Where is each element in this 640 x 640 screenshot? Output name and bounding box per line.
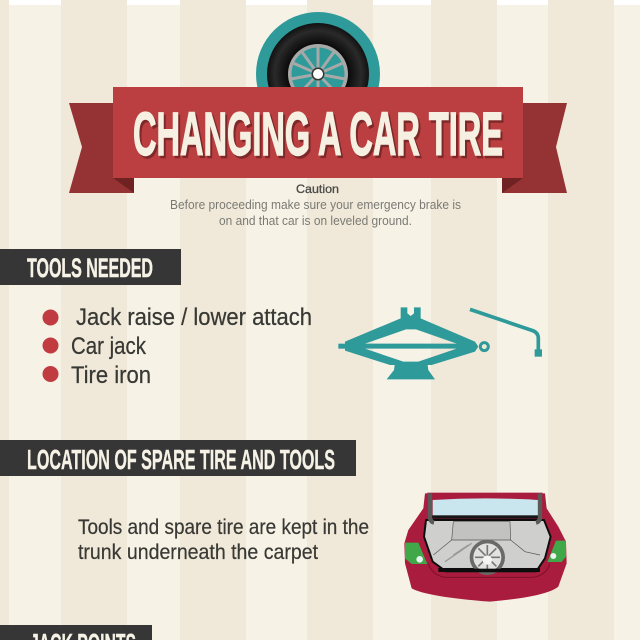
heading: location of spare tire and tools [0,440,356,476]
trunk lid [427,493,543,523]
tail light: right [547,541,566,562]
tail light: left [405,543,427,564]
location text block: trunk underneath the carpet [78,541,318,564]
heading: location of spare tire and tools: LOCATION OF SPARE TIRE AND TOOLS [27,444,335,475]
heading: tools needed: TOOLS NEEDED [27,253,153,283]
icon: car jack [338,307,488,379]
car body [404,493,567,602]
list item: tire iron [42,362,151,389]
caution text block: on and that car is on leveled ground. [219,213,412,228]
list item: tire iron: Tire iron [71,362,151,389]
icon: tire iron [470,309,542,357]
caution text block [170,182,461,228]
list item: car jack: Car jack [71,333,147,360]
illustration: car trunk with spare tire [404,493,567,602]
list item: jack raise / lower attach: Jack raise / lower attach [76,304,312,331]
icon: car wheel [256,12,380,136]
bumper line [428,563,550,577]
caution text block: Before proceeding make sure your emergency brake is [170,197,461,212]
heading: jack points [0,625,152,640]
list item: car jack [42,333,147,360]
caution text block: Caution [296,182,339,196]
heading: tools needed [0,249,181,285]
location text block [78,516,369,564]
location text block: Tools and spare tire are kept in the [78,516,369,539]
spare tire [445,540,537,575]
trunk interior [424,520,551,572]
ribbon banner [69,87,567,193]
tools list [42,304,312,389]
